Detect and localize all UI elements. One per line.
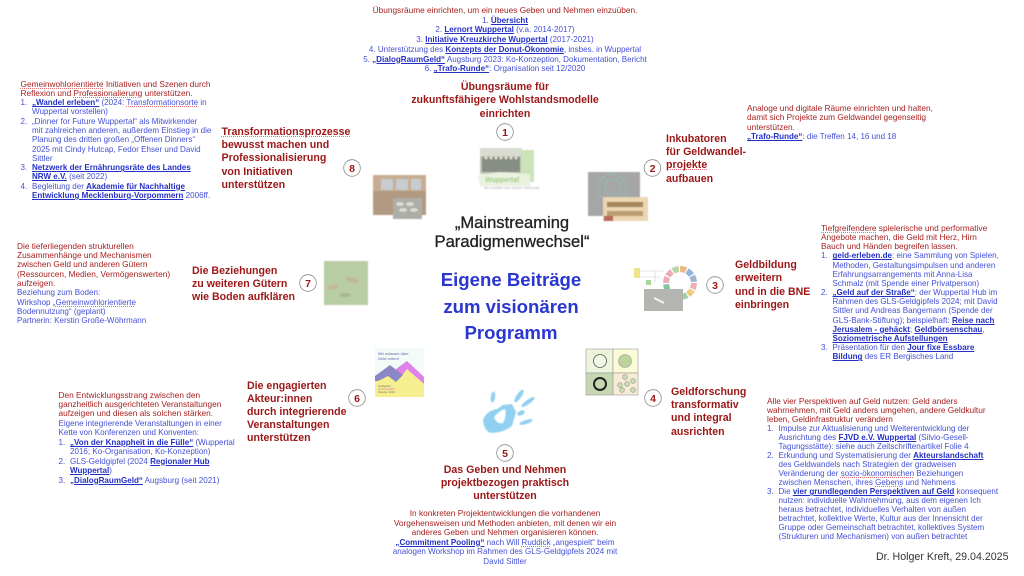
image 1: group photo	[478, 148, 539, 190]
intro 3: Angebote machen, die Geld mit Herz, Hirn	[821, 232, 977, 242]
list 1	[363, 16, 647, 73]
list 3: Jerusalem - gehäckt; Geldbörsenschau,	[832, 325, 985, 334]
intro 7: Die tieferliegenden strukturellen	[17, 240, 134, 250]
central title	[435, 212, 590, 251]
number circles 1 to 8: 8	[349, 163, 355, 175]
list 3: Soziometrische Aufstellungen	[832, 334, 948, 343]
list 1: 4. Unterstützung des Konzepts der Donut-Ökonomie, insbes. in Wuppertal	[369, 45, 641, 54]
image 5: blue hand print	[483, 388, 536, 433]
list 7: Beziehung zum Boden:	[17, 288, 100, 297]
intro 7: (Ressourcen, Medien, Vermögenswerten)	[17, 269, 170, 279]
number circles 1 to 8: 7	[305, 278, 311, 290]
heading 1: einrichten	[480, 108, 530, 120]
intro 4: wahrnehmen, mit Geld anders umgehen, andere Geldkultur	[767, 405, 986, 415]
list 4: 1.	[767, 424, 774, 433]
list 6: „Von der Knappheit in die Fülle“ (Wuppertal	[70, 438, 235, 447]
list 3: Methoden, Gestaltungsimpulsen und anderen	[832, 261, 995, 270]
image 7: soil and seed photo	[324, 261, 368, 305]
intro 2: Analoge und digitale Räume einrichten und halten,	[747, 102, 933, 112]
list 5: „Commitment Pooling“ nach Will Ruddick „angespielt“ beim	[395, 538, 615, 546]
list 8: mit zahlreichen anderen, außerdem Einstieg in die	[32, 126, 211, 135]
central blue subtitle: zum visionären	[443, 296, 579, 316]
central blue subtitle	[441, 269, 581, 343]
heading 7: zu weiteren Gütern	[192, 278, 287, 290]
heading 4: und integral	[671, 412, 732, 424]
heading 5: unterstützen	[473, 490, 537, 502]
heading 8: Professionalisierung	[222, 152, 326, 164]
image 6: Geldgipfel poster	[375, 348, 424, 397]
heading 2: Inkubatoren	[666, 132, 727, 144]
text block 8	[20, 78, 211, 200]
heading 6: Akteur:innen	[247, 393, 312, 405]
list 8: 2.	[20, 117, 27, 126]
list 8: NRW e.V. (seit 2022)	[32, 172, 107, 181]
list 1: 6. „Trafo-Runde“: Organisation seit 12/2020	[425, 64, 585, 73]
list 6: „DialogRaumGeld“ Augsburg (seit 2021)	[70, 476, 219, 485]
heading 6: Die engagierten	[247, 380, 326, 392]
intro 8: Reflexion und Professionalierung unterstützen.	[20, 88, 193, 98]
intro 4: leben, Geldinfrastruktur verändern	[767, 414, 893, 424]
text block 4	[767, 396, 998, 541]
image 1: group photo: Wir schaffen eine andere Wirtschaft	[484, 186, 539, 190]
number circles 1 to 8: 1	[502, 127, 508, 139]
list 8: 2025 mit Cindy Hutcap, Fedor Ehser und David	[32, 145, 201, 154]
intro 4: Alle vier Perspektiven auf Geld nutzen: Geld anders	[767, 396, 957, 406]
image 6: Geldgipfel poster: Geld reden!	[378, 357, 399, 361]
heading 6	[247, 380, 346, 444]
list 3: 2.	[821, 288, 828, 297]
list 5: analogen Workshop im Rahmen des GLS-Geldgipfels 2024 mit	[393, 547, 617, 556]
list 4: betrachtet, kollektive Werte, Kultur aus der Innensicht der	[778, 514, 983, 523]
text block 7	[17, 240, 170, 325]
heading 3: Geldbildung	[735, 259, 797, 271]
heading 2: aufbauen	[666, 173, 713, 185]
list 4: heraus betrachtet, individuelles Verhalten von außen	[778, 505, 966, 514]
heading 8: bewusst machen und	[222, 139, 329, 151]
image 6: Geldgipfel poster: Geldgipfel	[378, 384, 391, 388]
list 3: Schmalz (mit Spende einer Privatperson)	[832, 279, 979, 288]
heading 7: Die Beziehungen	[192, 264, 277, 276]
heading 1	[411, 80, 599, 120]
list 4: nutzen: individuelle Wahrnehmung, aus dem eigenen Ich	[778, 496, 981, 505]
image 8: event room photo	[373, 175, 426, 219]
intro 6: ganzheitlich ausgerichteten Veranstaltungen	[58, 399, 221, 409]
image 6: Geldgipfel poster: Oktober 2024	[378, 390, 395, 394]
intro 6	[58, 390, 221, 418]
list 7: Wirkshop „Gemeinwohlorientierte	[17, 298, 136, 307]
heading 1: zukunftsfähigere Wohlstandsmodelle	[411, 94, 599, 106]
list 8: Wuppertal vorstellen)	[32, 107, 108, 116]
list 3: „Geld auf der Straße“: der Wuppertal Hub im	[832, 288, 997, 297]
list 6: 2.	[58, 457, 65, 466]
heading 4: ausrichten	[671, 426, 725, 438]
heading 6: Veranstaltungen	[247, 419, 329, 431]
heading 8: unterstützen	[222, 179, 285, 191]
list 6: 2016; Ko-Organisation, Ko-Konzeption)	[70, 447, 210, 456]
list 3: geld-erleben.de: eine Sammlung von Spielen,	[832, 251, 999, 260]
list 8: Entwicklung Mecklenburg-Vorpommern 2006ff.	[32, 191, 210, 200]
intro 7: zwischen Geld und anderen Gütern	[17, 259, 148, 269]
heading 6: durch integrierende	[247, 406, 346, 418]
heading 7	[192, 264, 295, 303]
heading 8: von Initiativen	[222, 166, 293, 178]
intro 7	[17, 240, 170, 288]
image 1: group photo: Wuppertal	[485, 177, 519, 184]
central title: Paradigmenwechsel“	[435, 232, 589, 251]
list 2: „Trafo-Runde“: die Treffen 14, 16 und 18	[747, 132, 896, 141]
intro 3	[821, 223, 987, 251]
heading 4	[671, 386, 746, 438]
intro 6: aufzeigen und diesen als solchen stärken.	[58, 408, 213, 418]
number circles 1 to 8: 6	[354, 393, 360, 405]
image 4: four-quadrant sketch	[586, 349, 638, 395]
heading 1: Übungsräume für	[461, 81, 549, 93]
list 8: 4.	[20, 182, 27, 191]
list 4: 2.	[767, 451, 774, 460]
intro 7: aufzeigen.	[17, 278, 55, 288]
list 4: Gruppe oder Gemeinschaft betrachtet, kollektives System	[778, 523, 984, 532]
list 6: Eigene integrierende Veranstaltungen in einer	[58, 419, 222, 428]
intro 7: Zusammenhänge und Mechanismen	[17, 250, 152, 260]
image 3: SDG wheel, flow chart and photo	[634, 268, 694, 311]
heading 8: Transformationsprozesse	[222, 126, 350, 138]
list 6: Wuppertal)	[70, 466, 112, 475]
list 4: des Geldwandels nach Strategien der gradweisen	[778, 460, 956, 469]
text block 5	[393, 508, 618, 566]
list 7	[17, 288, 146, 325]
text block 3	[821, 223, 999, 361]
heading 5: Das Geben und Nehmen	[444, 464, 566, 476]
author and date: Dr. Holger Kreft, 29.04.2025	[876, 551, 1008, 563]
intro 5: In konkreten Projektentwicklungen die vorhandenen	[410, 508, 600, 518]
heading 4: Geldforschung	[671, 386, 746, 398]
intro 5	[394, 508, 616, 537]
list 8: Netzwerk der Ernährungsräte des Landes	[32, 163, 191, 172]
intro 5: anderes Geben und Nehmen organisieren können.	[412, 527, 598, 537]
list 1: 1. Übersicht	[482, 16, 528, 25]
heading 2	[666, 132, 746, 185]
list 4: 3.	[767, 487, 774, 496]
intro 6: Den Entwicklungsstrang zwischen den	[58, 390, 200, 400]
list 7: Partnerin: Kerstin Große-Wöhrmann	[17, 316, 146, 325]
list 8: Planung des dritten großen „Offenen Dinners“	[32, 135, 195, 144]
heading 2: für Geldwandel-	[666, 146, 746, 158]
heading 4: transformativ	[671, 399, 739, 411]
list 1: 2. Lernort Wuppertal (v.a. 2014-2017)	[435, 25, 575, 34]
list 4: Erkundung und Systematisierung der Akteurslandschaft	[778, 451, 983, 460]
list 4: Veränderung der sozio-ökonomischen Beziehungen	[778, 469, 963, 478]
list 3: Präsentation für den Jour fixe Essbare	[832, 343, 974, 352]
number circles 1 to 8: 4	[650, 393, 656, 405]
list 6: Kette von Konferenzen und Konventen:	[58, 428, 199, 437]
heading 2: projekte	[666, 159, 707, 171]
list 4: Impulse zur Aktualisierung und Weiterentwicklung der	[778, 424, 969, 433]
number circles 1 to 8	[300, 124, 723, 461]
heading 3: einbringen	[735, 299, 789, 311]
text block 1	[363, 5, 647, 73]
list 3	[821, 251, 999, 361]
central title: „Mainstreaming	[455, 212, 569, 232]
intro 3: Tiefgreifendere spielerische und performative	[821, 223, 987, 233]
central blue subtitle: Programm	[464, 322, 558, 343]
list 3: 3.	[821, 343, 828, 352]
list 4: zwischen Menschen, ihres Gebens und Nehmens	[778, 478, 956, 487]
list 3: Bildung des ER Bergisches Land	[832, 352, 953, 361]
list 8	[20, 98, 211, 200]
number circles 1 to 8: 5	[502, 448, 508, 460]
image 6: Geldgipfel poster: am Kronplatz	[378, 387, 395, 391]
image 2: concentric circles and wooden tray	[588, 172, 648, 221]
list 3: 1.	[821, 251, 828, 260]
central blue subtitle: Eigene Beiträge	[441, 269, 581, 290]
heading 5	[441, 464, 569, 502]
list 3: GLS-Bank-Stiftung); beispielhaft: Reise nach	[832, 316, 994, 325]
list 6: GLS-Geldgipfel (2024 Regionaler Hub	[70, 457, 210, 466]
intro 2: damit sich Projekte zum Geldwandel gegenseitig	[747, 112, 926, 122]
list 3: Sittler und Andreas Bangemann (Spende der	[832, 306, 993, 315]
list 5	[393, 538, 618, 566]
heading 8	[221, 126, 350, 191]
list 8: „Wandel erleben“ (2024: Transformationsorte in	[32, 98, 207, 107]
list 8: Begleitung der Akademie für Nachhaltige	[32, 182, 185, 191]
list 5: David Sittler	[483, 556, 527, 566]
intro 2: unterstützen.	[747, 122, 795, 132]
list 3: Rahmen des GLS-Geldgipfels 2024; mit David	[832, 297, 998, 306]
intro 2	[747, 102, 933, 132]
heading 5: projektbezogen praktisch	[441, 477, 569, 489]
number circles 1 to 8: 2	[650, 163, 656, 175]
text block 6	[58, 390, 235, 485]
list 8: „Dinner for Future Wuppertal“ als Mitwirkender	[32, 117, 197, 126]
list 7: Bodennutzung“ (geplant)	[17, 307, 106, 316]
list 6	[58, 419, 235, 485]
list 8: Sittler	[32, 154, 53, 163]
list 6: 1.	[58, 438, 65, 447]
heading 6: unterstützen	[247, 432, 311, 444]
list 4	[767, 424, 998, 541]
list 3: Erfahrungsarrangements mit Anna-Lisa	[832, 270, 972, 279]
text block 2	[747, 102, 933, 141]
intro 4	[767, 396, 986, 424]
heading 7: wie Boden aufklären	[192, 291, 295, 303]
heading 3: erweitern	[735, 272, 782, 284]
intro 1: Übungsräume einrichten, um ein neues Geben und Nehmen einzuüben.	[373, 5, 637, 15]
intro 3: Bauch und Händen begreifen lassen.	[821, 241, 958, 251]
number circles 1 to 8: 3	[712, 280, 718, 292]
image 6: Geldgipfel poster: Wir müssen über	[378, 352, 409, 356]
list 8: 3.	[20, 163, 27, 172]
list 4: Tagungsstätte): siehe auch Zeitschriftenartikel Folie 4	[778, 442, 969, 451]
list 1: 5. „DialogRaumGeld“ Augsburg 2023: Ko-Konzeption, Dokumentation, Bericht	[363, 55, 647, 64]
list 4: Ausrichtung des FJVD e.V. Wuppertal (Silvio-Gesell-	[778, 433, 969, 442]
intro 8	[20, 78, 211, 98]
list 1: 3. Initiative Kreuzkirche Wuppertal (2017-2021)	[416, 35, 594, 44]
list 6: 3.	[58, 476, 65, 485]
list 8: 1.	[20, 98, 27, 107]
intro 5: Vorgehensweisen und Methoden anbieten, mit denen wir ein	[394, 518, 616, 528]
list 4: Die vier grundlegenden Perspektiven auf Geld konsequent	[778, 487, 998, 496]
intro 8: Gemeinwohlorientierte Initiativen und Szenen durch	[20, 78, 211, 88]
list 4: (Strukturen und Mechanismen) von außen betrachtet	[778, 532, 967, 541]
heading 3: und in die BNE	[735, 286, 810, 298]
heading 3	[735, 259, 810, 311]
